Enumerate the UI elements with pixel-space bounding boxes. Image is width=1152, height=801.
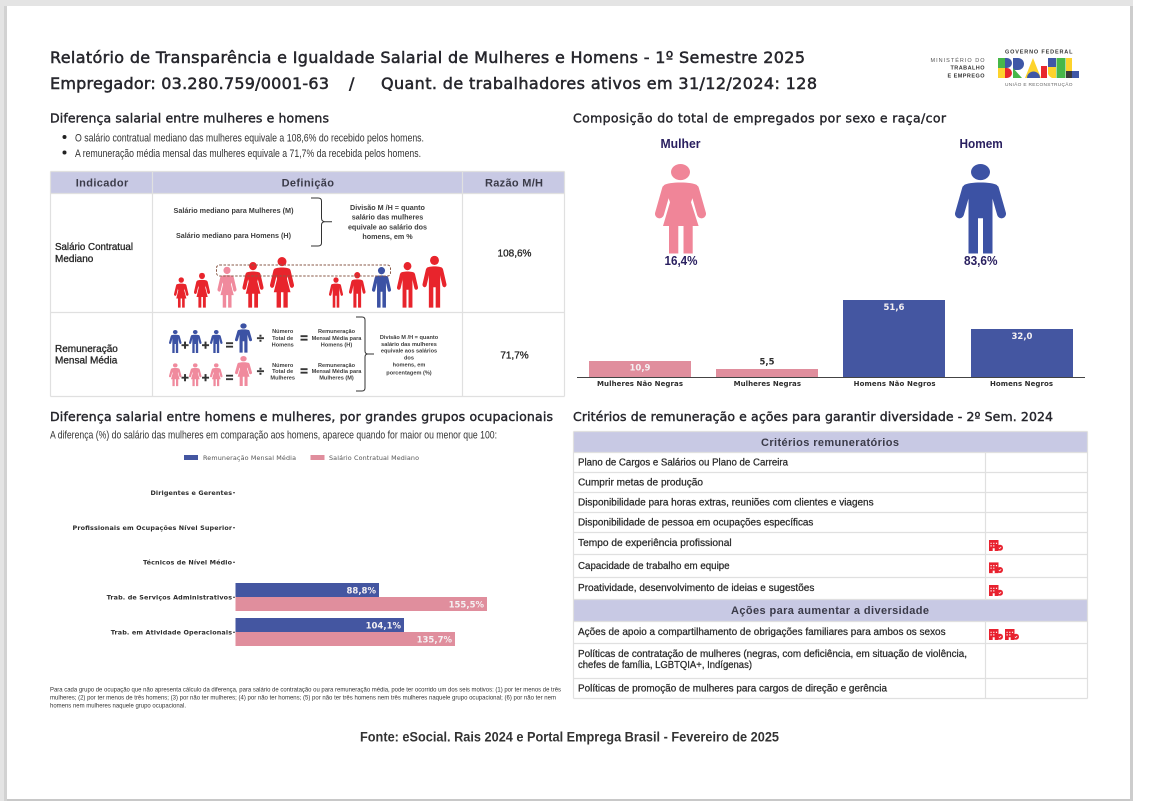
panel: critérios e ações: Disponibilidade de pessoa em ocupações específicas: [578, 518, 813, 529]
formula: homens: Homens (H): [321, 342, 352, 348]
panel: critérios e ações: Políticas de promoção de mulheres para cargos de direção e gerência: [578, 684, 888, 695]
formula: mulheres: Mulheres: [270, 375, 295, 381]
row label: remuneração: [55, 344, 118, 366]
header: razão: Razão M/H: [485, 178, 543, 190]
panel: critérios e ações: Disponibilidade para horas extras, reuniões com clientes e viagens: [578, 498, 874, 509]
definition text: divisão: Divisão M /H = quanto: [350, 203, 426, 212]
definition text: salário mediano: Salário mediano para Homens (H): [176, 231, 292, 240]
formula: mulheres: +: [181, 370, 189, 385]
definition text: divisão média: Divisão M /H = quanto: [380, 335, 439, 341]
formula: mulheres: =: [300, 364, 308, 378]
panel: tabela de indicadores: [50, 172, 564, 396]
bracket: [311, 198, 332, 246]
panel: critérios e ações: Cumprir metas de produção: [578, 478, 704, 489]
formula: mulheres: +: [202, 370, 210, 385]
formula: mulheres: Mulheres (M): [319, 375, 354, 381]
definition text: divisão média: homens, em: [393, 363, 425, 369]
header: indicador: Indicador: [76, 178, 129, 190]
row label: remuneração: Mensal Média: [55, 356, 118, 366]
formula: mulheres: [170, 356, 362, 386]
row label: salário contratual: [55, 242, 133, 265]
formula: mulheres: Remuneração: [318, 363, 356, 369]
formula: homens: +: [202, 338, 210, 352]
bar chart: raça/cor: [577, 300, 1085, 388]
bar chart: grupos ocupacionais: Profissionais em Ocupações Nível Superior: [72, 524, 233, 532]
heading: critérios: Critérios de remuneração e ações para garantir diversidade - 2º Sem. 2024: [573, 409, 1053, 424]
header: definição: Definição: [282, 178, 334, 190]
bar chart: raça/cor: Mulheres Não Negras: [597, 380, 683, 388]
icon: empresas: [989, 629, 1003, 640]
people row: [175, 256, 444, 308]
formula: mulheres: Número: [272, 363, 294, 369]
icon: empresas: [989, 540, 1003, 551]
formula: mulheres: Mensal Média para: [312, 369, 362, 375]
formula: mulheres: =: [226, 370, 234, 385]
bar chart: raça/cor: Mulheres Negras: [734, 380, 801, 388]
definition text: divisão: equivale ao salário dos: [348, 222, 427, 231]
bar chart: grupos ocupacionais: 135,7%: [417, 636, 452, 646]
logo: ministério e governo federal: E EMPREGO: [948, 74, 985, 80]
bar chart: grupos ocupacionais: [72, 489, 487, 646]
footnote: homens nem mulheres naquele grupo ocupacional.: [50, 702, 186, 710]
bullets: A remuneração média mensal das mulheres equivale a 71,7% da recebida pelos homens.: [75, 148, 421, 160]
definition text: divisão: [348, 203, 427, 241]
definition text: divisão média: salário das mulheres: [381, 342, 437, 348]
bar chart: grupos ocupacionais: Trab. em Atividade Operacionais: [111, 628, 232, 636]
formula: homens: =: [226, 338, 234, 352]
logo: ministério e governo federal: MINISTÉRIO DO: [930, 57, 985, 64]
panel: homem: [960, 136, 1003, 268]
definition text: salário mediano: Salário mediano para Mulheres (M): [174, 206, 294, 215]
dashed highlight: [216, 265, 390, 276]
logo: ministério e governo federal: [930, 50, 1079, 88]
formula: homens: Homens: [272, 342, 294, 348]
title: Relatório de Transparência e Igualdade Salarial de Mulheres e Homens - 1º Semestre 2025: [50, 48, 805, 67]
panel: critérios e ações: Ações de apoio a compartilhamento de obrigações familiares para ambos os sexos: [578, 627, 946, 638]
definition text: divisão: homens, em %: [362, 232, 413, 241]
panel: critérios e ações: Plano de Cargos e Salários ou Plano de Carreira: [578, 458, 789, 469]
label: homem: Homem: [960, 136, 1003, 151]
heading: grupos ocupacionais: Diferença salarial entre homens e mulheres, por grandes grupos ocupacionais: [50, 409, 553, 424]
label: mulher: Mulher: [660, 136, 700, 151]
title: Quant. de trabalhadores ativos em 31/12/2024: 128: [381, 74, 817, 93]
row label: salário contratual: Salário Contratual: [55, 242, 133, 253]
definition text: divisão média: [380, 335, 439, 376]
bar chart: raça/cor: 5,5: [759, 358, 775, 368]
source: Fonte: eSocial. Rais 2024 e Portal Emprega Brasil - Fevereiro de 2025: [360, 728, 779, 744]
formula: homens: +: [181, 338, 189, 352]
row label: salário contratual: Mediano: [55, 254, 94, 265]
legend: Salário Contratual Mediano: [329, 454, 419, 462]
formula: homens: Mensal Média para: [312, 336, 362, 342]
formula: homens: Remuneração: [318, 329, 356, 335]
bullets: [62, 132, 424, 160]
bar chart: grupos ocupacionais: 155,5%: [449, 600, 484, 610]
heading: diferença salarial: Diferença salarial entre mulheres e homens: [50, 110, 329, 126]
panel: mulher: [660, 136, 702, 268]
bar chart: grupos ocupacionais: 88,8%: [346, 586, 376, 596]
header: critérios remuneratórios: Critérios remuneratórios: [761, 437, 899, 449]
bullets: O salário contratual mediano das mulheres equivale a 108,6% do recebido pelos homens.: [75, 132, 424, 144]
definition text: divisão média: dos: [404, 356, 414, 362]
panel: critérios e ações: Proatividade, desenvolvimento de ideias e sugestões: [578, 583, 814, 594]
icon: empresas: [989, 585, 1003, 596]
panel: critérios e ações: chefes de família, LGBTQIA+, Indígenas): [578, 660, 752, 671]
panel: critérios e ações: Políticas de contratação de mulheres (negras, com deficiência, em situação de violência,: [578, 649, 967, 660]
legend: Remuneração Mensal Média: [203, 454, 296, 462]
footnote: Para cada grupo de ocupação que não apresenta cálculo da diferença, para salário de contratação ou para remuneração média, pode ter ocorrido um dos seis motivos: (1) por ter menos de três: [50, 686, 562, 694]
bar chart: grupos ocupacionais: Trab. de Serviços Administrativos: [107, 594, 232, 602]
formula: homens: =: [300, 330, 308, 346]
bar chart: raça/cor: 32,0: [1012, 332, 1033, 342]
formula: homens: Total de: [272, 336, 293, 342]
title: [50, 48, 817, 93]
row label: remuneração: Remuneração: [55, 344, 118, 355]
icon: empresas: [989, 562, 1003, 573]
logo: ministério e governo federal: GOVERNO FEDERAL: [1005, 50, 1073, 56]
icon: homem: [960, 164, 1002, 254]
subtitle: A diferença (%) do salário das mulheres em comparação aos homens, aparece quando for maior ou menor que 100:: [50, 430, 497, 442]
definition text: salário mediano: [174, 206, 294, 240]
footnote: mulheres; (2) por ter menos de três homens; (3) por não ter mulheres; (4) por não ter homens; (5) por não ter três homens nem três mulheres naquele grupo ocupacional; (6) por não ter nem: [50, 694, 556, 702]
logo: ministério e governo federal: UNIÃO E RECONSTRUÇÃO: [1005, 81, 1073, 88]
legend: [184, 454, 419, 462]
header: ações: Ações para aumentar a diversidade: [731, 605, 929, 617]
value: 83,6%: 83,6%: [964, 253, 998, 268]
bar chart: raça/cor: Homens Negros: [990, 380, 1053, 388]
heading: composição: Composição do total de empregados por sexo e raça/cor: [573, 110, 947, 126]
formula: mulheres: ÷: [257, 364, 264, 378]
bracket: [356, 317, 374, 391]
definition text: divisão: salário das mulheres: [352, 212, 423, 221]
bar chart: grupos ocupacionais: Dirigentes e Gerentes: [150, 489, 232, 497]
logo: ministério e governo federal: TRABALHO: [950, 66, 985, 72]
panel: critérios e ações: Tempo de experiência profissional: [578, 538, 732, 549]
icon: mulher: [660, 164, 702, 254]
bar chart: raça/cor: Homens Não Negros: [854, 380, 936, 388]
definition text: divisão média: porcentagem (%): [386, 370, 432, 376]
formula: mulheres: Total de: [272, 369, 293, 375]
footnote: [50, 686, 562, 710]
bar chart: raça/cor: 10,9: [630, 364, 651, 374]
title: Empregador: 03.280.759/0001-63: [50, 74, 329, 93]
value: 16,4%: 16,4%: [664, 253, 698, 268]
definition text: divisão média: equivale aos salários: [381, 349, 437, 355]
panel: critérios e ações: Capacidade de trabalho em equipe: [578, 561, 730, 572]
icon: empresas: [1005, 629, 1019, 640]
title: /: [349, 74, 355, 93]
bar chart: grupos ocupacionais: Técnicos de Nível Médio: [143, 558, 233, 566]
value: 108,6%: 108,6%: [498, 248, 532, 260]
formula: homens: Número: [272, 329, 294, 335]
value: 71,7%: 71,7%: [500, 350, 529, 362]
formula: homens: ÷: [257, 330, 264, 346]
panel: critérios e ações: [574, 432, 1088, 698]
bar chart: raça/cor: 51,6: [884, 303, 905, 313]
formula: homens: [170, 323, 362, 353]
bar chart: grupos ocupacionais: 104,1%: [366, 622, 401, 632]
